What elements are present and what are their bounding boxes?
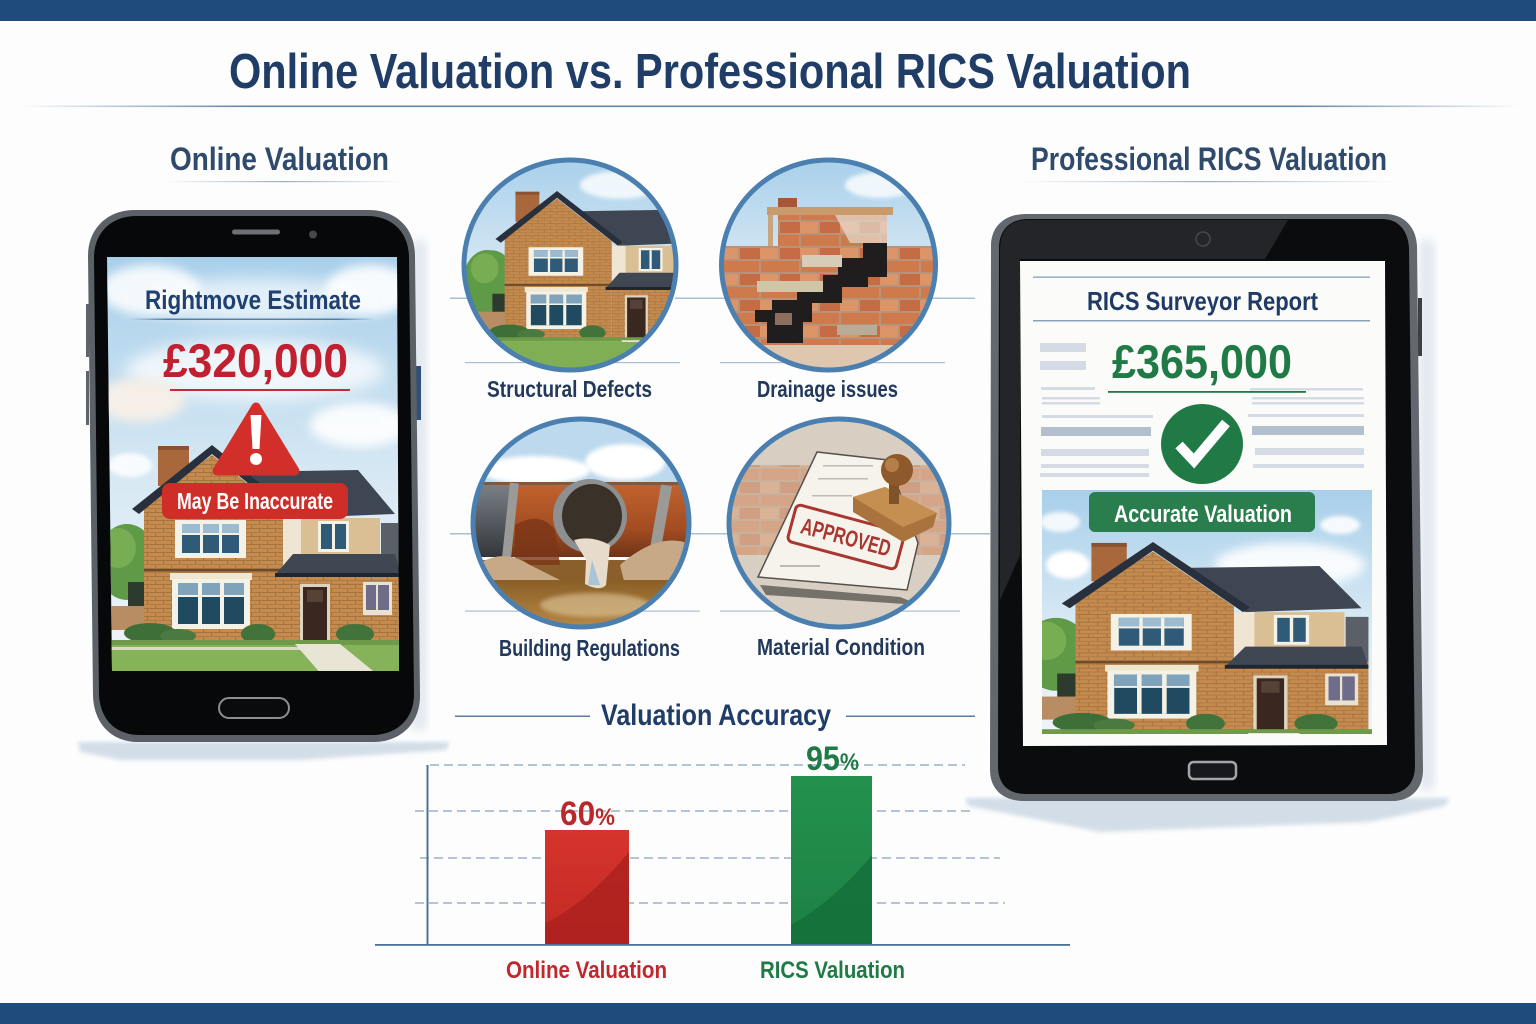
panel: building regulations [470,415,692,661]
gridlines [415,765,1005,903]
connector lines [450,298,990,612]
report heading: RICS Surveyor Report [1087,286,1318,316]
label: Material Condition [757,634,925,660]
icon: check mark [1161,404,1243,484]
bar: online valuation [545,830,629,944]
icon: warning triangle [217,407,295,471]
report house image [1042,490,1372,734]
home button [1189,762,1236,779]
label: online valuation: Online Valuation [506,957,667,984]
bottom bar [0,1003,1536,1024]
label: RICS valuation: RICS Valuation [760,957,905,984]
phone panel [78,210,450,760]
panel: structural defects [462,158,678,397]
value: 60%: 60% [560,795,615,833]
axes [426,765,428,945]
label: Drainage issues [757,376,898,402]
online price: £320,000 [163,334,348,387]
image: cracked brick wall [724,162,933,368]
top bar [0,0,1536,21]
camera [1196,232,1210,246]
image: house [466,162,674,368]
image: approved stamp: APPROVED [798,513,894,561]
image: approved stamp [732,422,946,624]
label: Structural Defects [487,376,652,402]
report rules [1033,276,1370,278]
value: 95%: 95% [806,740,859,778]
tablet panel [965,214,1450,832]
phone heading: Rightmove Estimate [145,285,361,315]
heading: online valuation: Online Valuation [170,141,389,177]
warning badge: May Be Inaccurate [177,488,333,514]
bar chart [375,740,1070,984]
phone screen [107,257,399,671]
accurate badge: Accurate Valuation [1114,501,1292,528]
RICS price: £365,000 [1112,335,1292,388]
warning badge [162,483,348,519]
panel: material condition [725,415,953,660]
bar: RICS valuation [791,776,872,944]
panel: drainage issues [718,155,940,402]
report placeholder lines [1040,343,1364,477]
image: broken pipe [476,422,686,624]
speaker [232,230,280,234]
label: Building Regulations [499,635,680,661]
title: Online Valuation vs. Professional RICS Valuation [229,45,1191,99]
chart heading: Valuation Accuracy [601,699,831,732]
report page [1020,261,1387,746]
accurate badge [1089,492,1315,532]
camera [309,230,317,238]
home button [219,698,289,718]
heading: professional RICS valuation: Professional RICS Valuation [1031,141,1387,177]
bezel glare [1000,220,1288,600]
